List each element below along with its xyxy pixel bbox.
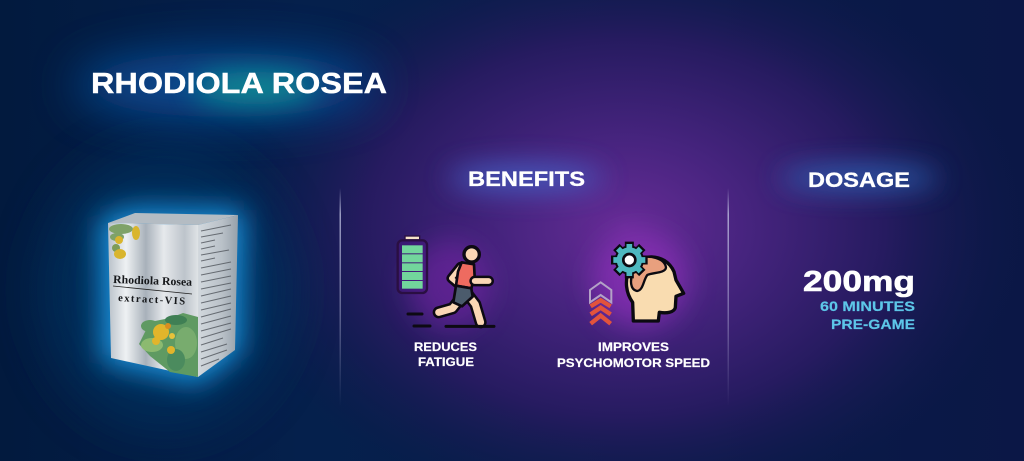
box glow <box>100 208 244 384</box>
product box <box>100 208 244 384</box>
icon: battery and runner <box>398 236 494 326</box>
box top face <box>108 213 238 225</box>
title: RHODIOLA ROSEA <box>91 68 387 100</box>
heading: benefits: BENEFITS <box>468 167 585 191</box>
label: improves psychomotor speed: PSYCHOMOTOR SPEED <box>557 356 710 370</box>
dosage amount: 200mg <box>803 266 915 298</box>
label: reduces fatigue: REDUCES <box>414 340 477 354</box>
icon: battery <box>398 236 427 293</box>
dosage timing <box>820 298 915 332</box>
dosage timing: 60 MINUTES <box>820 298 915 314</box>
box side face <box>198 215 238 377</box>
dosage timing: PRE-GAME <box>831 316 915 332</box>
box label: extract-VIS <box>118 293 185 308</box>
icon: head with gear and chevrons <box>590 242 684 324</box>
label: improves psychomotor speed <box>557 340 710 370</box>
icon: chevrons <box>590 282 611 324</box>
box label <box>113 274 193 308</box>
label: improves psychomotor speed: IMPROVES <box>598 340 669 354</box>
box label: Rhodiola Rosea <box>113 274 193 289</box>
divider right <box>728 188 729 406</box>
divider left <box>340 188 341 406</box>
icon: runner <box>408 247 494 326</box>
label: reduces fatigue: FATIGUE <box>418 355 474 369</box>
plant photo <box>139 313 198 377</box>
icon: gear <box>611 242 648 278</box>
icon: head <box>626 257 684 321</box>
heading: dosage: DOSAGE <box>808 168 910 192</box>
flowers top-left <box>109 224 140 259</box>
box front face <box>108 223 198 377</box>
label: reduces fatigue <box>414 340 477 369</box>
